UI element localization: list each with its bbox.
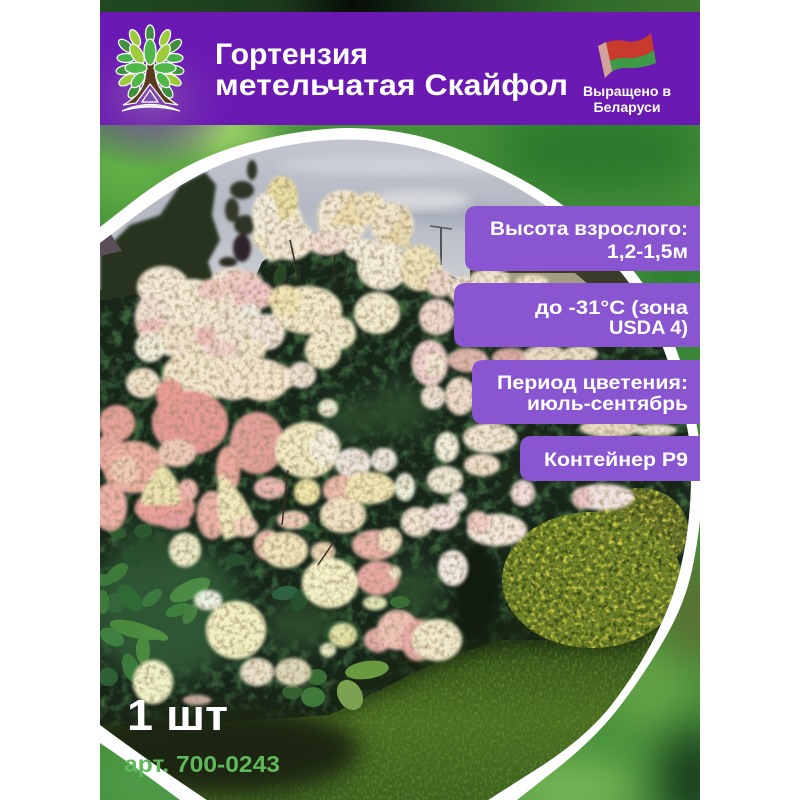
panel: container: Контейнер Р9 [544,450,688,471]
hydrangea flower heads [93,175,677,705]
top panicles [252,175,454,297]
dark top strip [100,0,700,12]
panel: frost hardiness: USDA 4) [609,318,688,339]
panel: flowering period [472,360,700,424]
logo: tree [115,25,185,111]
panel: frost hardiness: до -31°С (зона [535,298,689,319]
grass [122,626,660,800]
made in Belarus label [583,83,671,115]
stems among flowers [282,240,347,565]
middle cream heads [126,269,598,417]
white curved frame [100,128,702,800]
logo: inner leaves [125,39,176,90]
dark foliage base [100,235,700,730]
dark shadow under spirea [453,540,497,640]
infographic canvas [100,0,700,800]
panel: flowering period: Период цветения: [497,373,688,394]
panel: container [520,436,700,481]
panel: height: Высота взрослого: [490,219,688,240]
icon: belarus flag [598,33,656,78]
far roof and distant trees [470,270,630,283]
right flower heads [401,419,677,586]
panel: flowering period: июль-сентябрь [527,394,688,415]
title: метельчатая Скайфол [215,69,568,102]
panel: frost hardiness [454,283,700,347]
photo of hydrangea bush [90,130,700,800]
made in Belarus label: Выращено в [583,83,671,99]
panel: height [465,206,700,271]
upper left mass [135,266,285,362]
made in Belarus label: Беларуси [594,99,660,115]
sky [100,140,629,290]
panel: height: 1,2-1,5м [607,242,688,263]
house roof [100,233,122,256]
logo: outer leaves [115,25,185,100]
green leaves [93,263,410,715]
header band [60,12,700,170]
grass edge shadow [330,632,640,700]
quantity label: 1 шт [127,691,228,740]
photo base [100,290,700,800]
background trees [100,158,260,300]
back spirea bush [596,488,688,557]
article number: арт. 700-0243 [124,751,280,777]
dark patch at base of the shrub [90,705,360,795]
lighter foliage zones [90,385,440,680]
title [215,38,568,102]
lower left pink heads [93,379,284,540]
title: Гортензия [215,38,368,71]
right white margin [700,0,800,800]
lowest pink-cream head [364,610,462,661]
central heads [133,422,415,705]
yellow-green spirea bush [502,512,682,648]
